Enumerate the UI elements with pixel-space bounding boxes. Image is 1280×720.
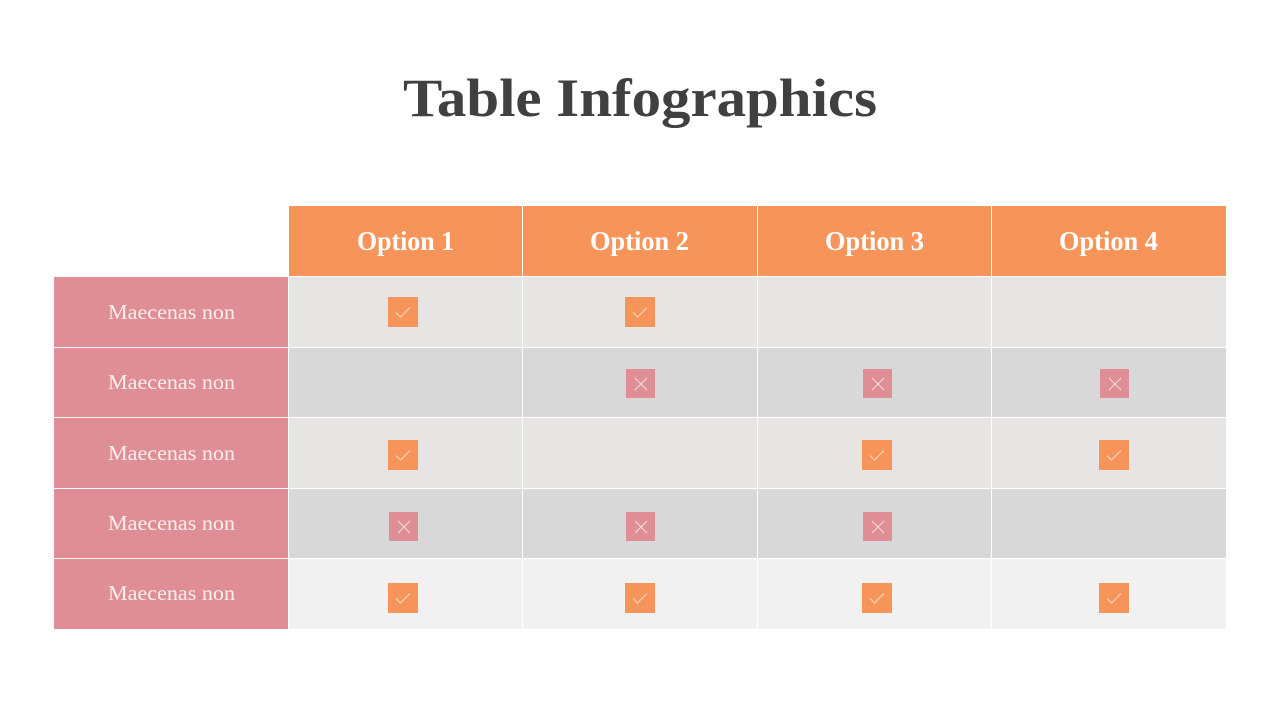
icon: cross row 4 option 1 bbox=[389, 512, 418, 541]
header: Option 2: Option 2 bbox=[590, 226, 689, 256]
icon: cross row 4 option 3 bbox=[863, 512, 892, 541]
row label 1 bbox=[54, 277, 288, 347]
row label 5: Maecenas non bbox=[108, 581, 236, 605]
icon: cross row 2 option 2 bbox=[626, 369, 655, 398]
row label 4 bbox=[54, 489, 288, 558]
icon: check row 1 option 1 bbox=[388, 297, 418, 327]
row label 1: Maecenas non bbox=[108, 300, 236, 324]
icon: check row 3 option 3 bbox=[862, 440, 892, 470]
table bbox=[54, 206, 1226, 629]
header: Option 4 bbox=[992, 206, 1226, 276]
title: Table Infographics bbox=[403, 68, 877, 128]
icon: check row 5 option 2 bbox=[625, 583, 655, 613]
icon: check row 1 option 2 bbox=[625, 297, 655, 327]
icon: check row 5 option 3 bbox=[862, 583, 892, 613]
icon: cross row 4 option 2 bbox=[626, 512, 655, 541]
header: Option 3: Option 3 bbox=[825, 226, 924, 256]
icon: check row 3 option 1 bbox=[388, 440, 418, 470]
header: Option 1: Option 1 bbox=[357, 226, 454, 256]
header: Option 4: Option 4 bbox=[1059, 226, 1158, 256]
icon: cross row 2 option 4 bbox=[1100, 369, 1129, 398]
header row bbox=[289, 206, 1226, 276]
icon: check row 3 option 4 bbox=[1099, 440, 1129, 470]
row labels bbox=[54, 277, 288, 629]
table body cells bbox=[289, 277, 1226, 629]
row label 2 bbox=[54, 348, 288, 417]
row label 5 bbox=[54, 559, 288, 629]
row label 2: Maecenas non bbox=[108, 370, 236, 394]
header: Option 3 bbox=[758, 206, 991, 276]
icon: cross row 2 option 3 bbox=[863, 369, 892, 398]
row label 3 bbox=[54, 418, 288, 488]
icon: check row 5 option 4 bbox=[1099, 583, 1129, 613]
header: Option 2 bbox=[523, 206, 757, 276]
row label 3: Maecenas non bbox=[108, 441, 236, 465]
icon: check row 5 option 1 bbox=[388, 583, 418, 613]
row label 4: Maecenas non bbox=[108, 511, 236, 535]
header: Option 1 bbox=[289, 206, 522, 276]
